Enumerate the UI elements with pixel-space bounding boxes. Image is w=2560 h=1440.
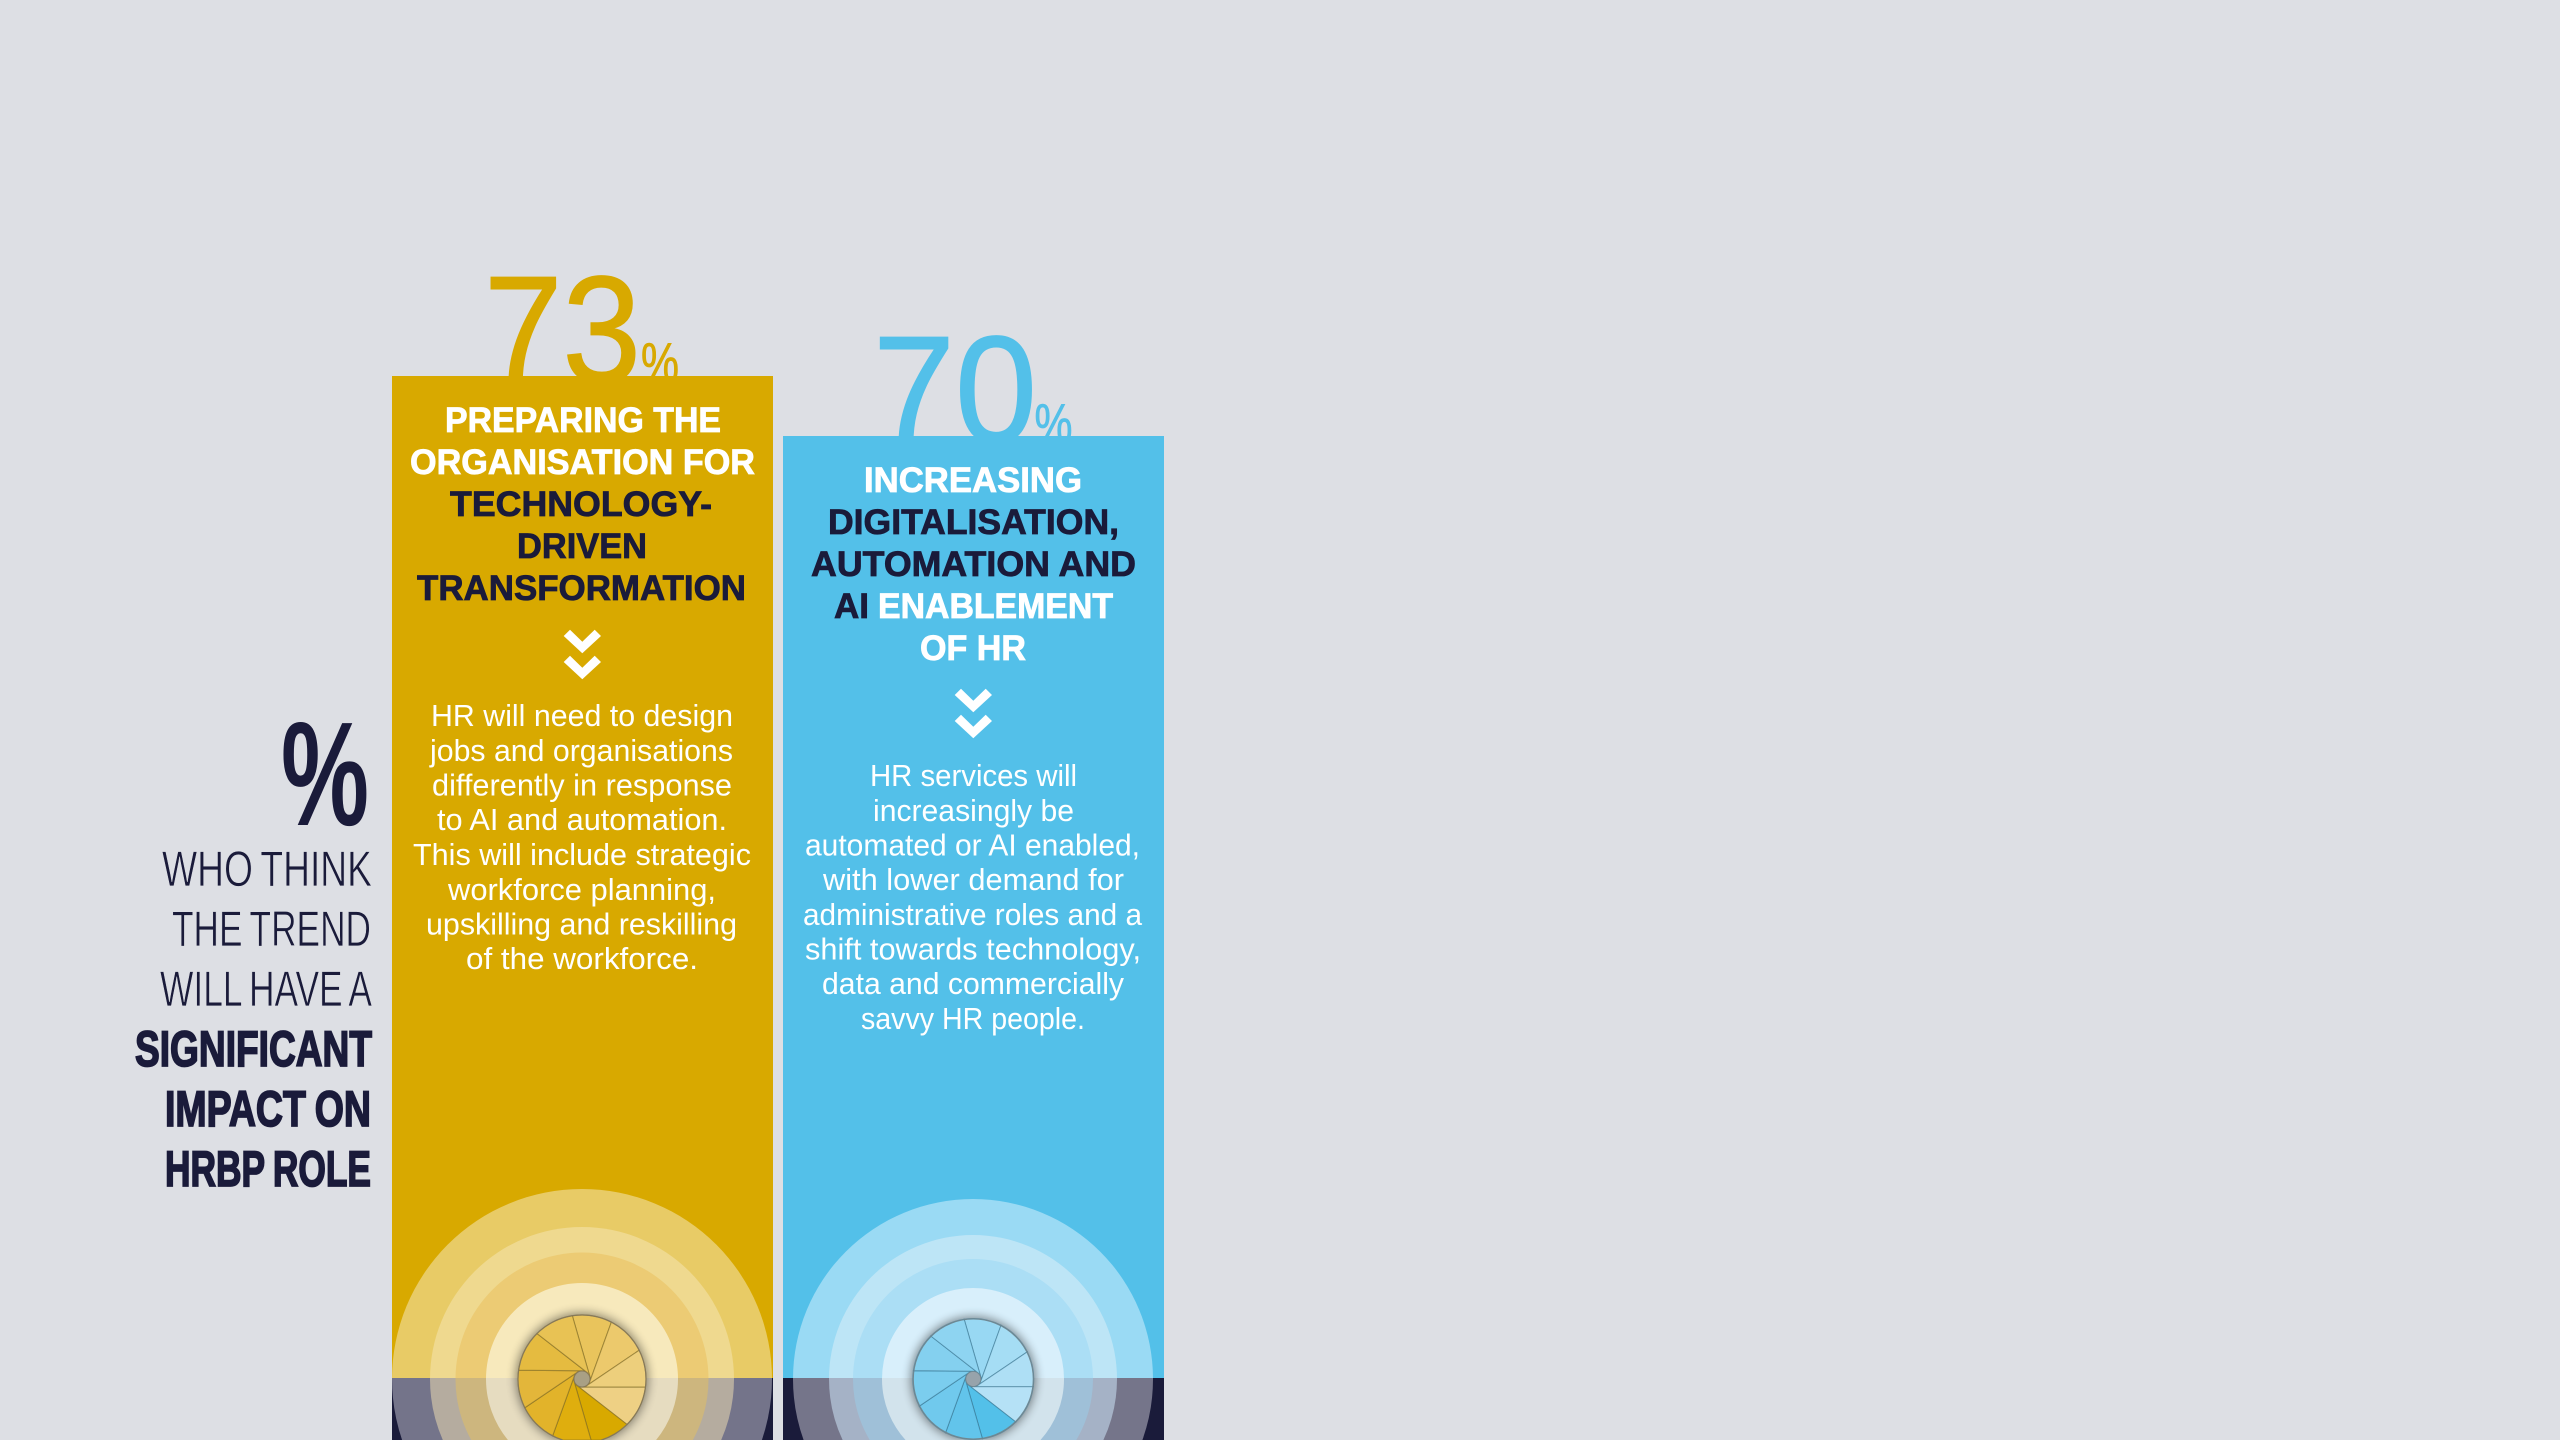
icon: double chevron	[955, 689, 992, 738]
heading: PREPARING THE	[445, 401, 721, 440]
label text: HRBP ROLE	[165, 1141, 371, 1197]
heading	[811, 461, 1136, 668]
body text: automated or AI enabled,	[805, 828, 1140, 862]
concentric ripple rings	[392, 1189, 773, 1440]
label text: WILL HAVE A	[160, 961, 372, 1017]
blue column	[783, 436, 1164, 1440]
number 73 percent: %	[641, 331, 679, 393]
gold column	[392, 376, 773, 1440]
number 70 percent: %	[1034, 392, 1072, 454]
body text: workforce planning,	[447, 872, 716, 907]
panel: increasing digitalisation, 70 percent	[783, 305, 1164, 1440]
number 70 percent: 70	[873, 305, 1037, 475]
body text: HR will need to design	[431, 698, 733, 733]
icon: pinwheel gauge	[516, 1313, 648, 1440]
body text: HR services will	[870, 758, 1077, 793]
body text: administrative roles and a	[803, 897, 1143, 932]
label text: SIGNIFICANT	[135, 1021, 372, 1077]
heading: AUTOMATION AND	[811, 545, 1136, 584]
heading	[410, 401, 755, 608]
heading: TECHNOLOGY-	[450, 485, 712, 524]
body text	[413, 698, 751, 976]
heading: ENABLEMENT	[878, 587, 1113, 626]
icon: pinwheel gauge	[911, 1317, 1036, 1439]
label text: WHO THINK	[162, 841, 372, 897]
heading: TRANSFORMATION	[417, 569, 746, 608]
body text	[803, 758, 1143, 1036]
body text: upskilling and reskilling	[426, 906, 737, 942]
body text: with lower demand for	[822, 862, 1124, 897]
concentric ripple rings	[783, 1199, 1164, 1440]
body text: shift towards technology,	[805, 932, 1141, 966]
heading: OF HR	[920, 629, 1026, 668]
label text: THE TREND	[172, 901, 371, 957]
body text: differently in response	[432, 768, 732, 802]
icon: double chevron	[564, 630, 601, 679]
large percent symbol: %	[281, 692, 369, 857]
body text: data and commercially	[822, 966, 1124, 1001]
heading: INCREASING	[864, 461, 1082, 500]
body text: This will include strategic	[413, 837, 751, 872]
left label: share who think the trend will have significant impact	[135, 692, 372, 1197]
body text: increasingly be	[873, 793, 1074, 828]
body text: to AI and automation.	[437, 802, 727, 837]
body text: savvy HR people.	[861, 1001, 1085, 1036]
heading: DRIVEN	[517, 527, 647, 566]
heading: AI	[834, 587, 869, 626]
body text: of the workforce.	[466, 941, 698, 976]
body text: jobs and organisations	[429, 733, 733, 768]
number 73 percent: 73	[484, 245, 641, 415]
panel: preparing the organisation, 73 percent	[392, 245, 773, 1440]
label text	[135, 841, 372, 1197]
label text: IMPACT ON	[165, 1081, 371, 1137]
heading: DIGITALISATION,	[828, 503, 1119, 542]
heading: ORGANISATION FOR	[410, 443, 755, 482]
